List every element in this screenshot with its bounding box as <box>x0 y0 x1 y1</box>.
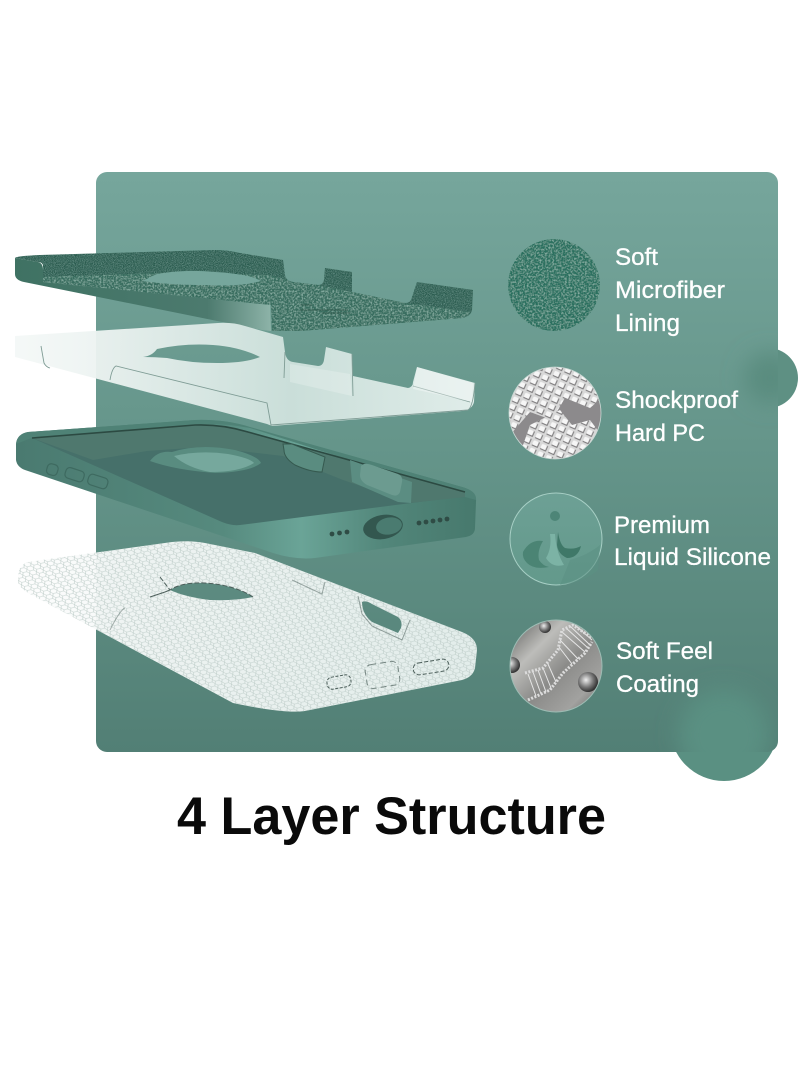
label: soft feel coating: Soft Feel <box>616 638 713 665</box>
title: 4 Layer Structure <box>177 787 606 846</box>
label: soft microfiber lining: Lining <box>615 310 680 337</box>
side wall with cutout <box>350 460 412 503</box>
buttons <box>46 463 109 490</box>
icon: liquid silicone droplet <box>510 493 602 585</box>
icon ring: DNA circle edge <box>510 620 602 712</box>
icon: shockproof hard PC pellets <box>509 367 600 459</box>
layer 2: clear hard PC shell <box>15 323 475 426</box>
label: soft microfiber lining: Microfiber <box>615 277 725 304</box>
label: shockproof hard PC <box>615 387 738 447</box>
side button recess <box>283 444 325 472</box>
soft bump shading inside panel <box>680 354 778 752</box>
layer 4: clear soft-feel coating mesh <box>18 541 477 712</box>
icon ring: pellets circle edge <box>509 367 601 459</box>
icon: soft microfiber swatch <box>508 239 600 331</box>
label: premium liquid silicone <box>614 512 771 571</box>
label: shockproof hard PC: Shockproof <box>615 387 738 414</box>
label: soft feel coating <box>616 638 713 698</box>
layer 1: microfiber lining shell <box>15 250 473 331</box>
label: soft feel coating: Coating <box>616 671 699 698</box>
background decorative bump: bottom right <box>670 673 778 781</box>
label: premium liquid silicone: Liquid Silicone <box>614 544 771 571</box>
icon: DNA soft feel coating <box>504 620 602 712</box>
label: shockproof hard PC: Hard PC <box>615 420 705 447</box>
panel: green background <box>96 172 778 752</box>
background decorative bump: right <box>738 348 798 408</box>
layer 3: liquid silicone case <box>16 420 476 558</box>
label: soft microfiber lining <box>615 244 725 337</box>
camera ring <box>150 447 261 473</box>
label: soft microfiber lining: Soft <box>615 244 658 271</box>
speaker holes <box>330 517 449 536</box>
charging port <box>361 512 405 542</box>
label: premium liquid silicone: Premium <box>614 512 710 539</box>
